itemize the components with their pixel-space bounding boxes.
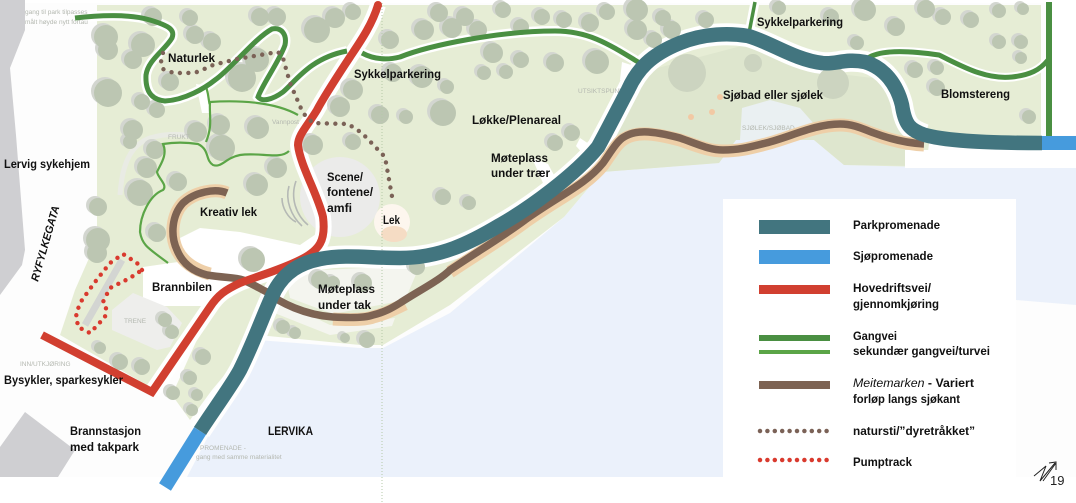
route: Parkpromenade teal <box>200 34 1042 431</box>
water: Lervika <box>187 140 1076 477</box>
map labels: Sykkelparkering <box>757 15 843 29</box>
map labels: LERVIKA <box>268 424 313 438</box>
bathing pond <box>740 100 815 140</box>
park lawn <box>60 5 1041 420</box>
map labels: RYFYLKEGATA <box>29 204 62 283</box>
plaza and road surfaces <box>143 0 1076 306</box>
lek surfacing <box>381 226 407 242</box>
faint base map labels: UTSIKTSPUNKT <box>578 88 628 95</box>
faint base map labels: PROMENADE - <box>200 445 246 452</box>
white road halos <box>75 2 1048 431</box>
map labels: Bysykler, sparkesykler <box>4 373 123 387</box>
map labels: Kreativ lek <box>200 205 257 219</box>
legend: Gangvei: Gangvei <box>853 329 897 343</box>
dotted section line <box>381 3 383 503</box>
legend: Hovedriftsvei: gjennomkjøring <box>853 297 939 311</box>
map labels: Lek <box>383 213 400 227</box>
amphitheatre arcs <box>282 181 308 226</box>
legend: natursti: natursti/”dyretråkket” <box>853 424 975 438</box>
route: pumptrack dotted <box>76 254 142 333</box>
fruit path arc <box>120 134 205 195</box>
route: Meitemarken tan edge <box>173 125 924 320</box>
map labels: under tak <box>318 298 371 312</box>
page number: 19 <box>1050 473 1064 488</box>
map labels: Naturlek <box>168 51 215 65</box>
map labels: fontene/ <box>327 185 374 199</box>
faint base map labels: Vannpost <box>272 119 299 126</box>
map labels: Brannstasjon <box>70 424 141 438</box>
map labels: Brannbilen <box>152 280 212 294</box>
scene circle <box>300 157 380 237</box>
route: secondary walkways <box>140 86 298 263</box>
route: Hovedriftsvei red road <box>42 1 382 392</box>
faint base map labels: gang med samme materialitet <box>196 454 282 461</box>
seaside trees <box>668 54 849 99</box>
lower shore walkway <box>272 300 395 335</box>
legend panel <box>723 199 1016 480</box>
legend: Hovedriftsvei <box>759 281 939 311</box>
faint base map labels: gang til park tilpasses <box>25 9 88 16</box>
legend: Gangvei: sekundær gangvei/turvei <box>853 344 990 358</box>
legend: Meitemarken <box>759 376 974 406</box>
route: Meitemarken brown path <box>173 124 924 318</box>
faint base map labels: SJØLEK/SJØBAD <box>742 125 795 132</box>
route: natursti dotted <box>161 52 393 202</box>
lek circle <box>374 204 410 240</box>
map labels: med takpark <box>70 440 139 454</box>
route: pumptrack base <box>85 260 122 325</box>
legend: Hovedriftsvei: Hovedriftsvei/ <box>853 281 932 295</box>
map labels: Løkke/Plenareal <box>472 113 561 127</box>
route: Gangvei main paths <box>75 2 1049 136</box>
legend: Pumptrack: Pumptrack <box>853 455 912 469</box>
Møteplass under tak plaza <box>285 265 420 314</box>
buildings <box>0 0 75 477</box>
legend: Meitemarken: Meitemarken - Variert <box>853 376 974 390</box>
map labels: amfi <box>327 201 352 215</box>
legend: Parkpromenade: Parkpromenade <box>853 218 940 232</box>
orange play spots <box>688 94 723 120</box>
faint base map labels: INN/UTKJØRING <box>20 361 71 368</box>
map labels: Møteplass <box>318 282 375 296</box>
faint base map labels: FRUKT <box>168 134 190 141</box>
faint base map labels <box>20 9 795 461</box>
route: Sjøpromenade blue segments <box>165 143 1076 487</box>
map labels: Sjøbad eller sjølek <box>723 88 823 102</box>
trene plaza <box>112 293 182 350</box>
legend: Sjøpromenade: Sjøpromenade <box>853 249 933 263</box>
map labels: Blomstereng <box>941 87 1010 101</box>
faint base map labels: målt høyde nytt fortau <box>25 18 88 26</box>
map labels: under trær <box>491 166 550 180</box>
icon: north arrow <box>1034 462 1056 481</box>
legend: Parkpromenade <box>759 218 940 234</box>
map labels: Scene/ <box>327 170 364 184</box>
legend: Meitemarken: forløp langs sjøkant <box>853 392 960 406</box>
faint base map labels: TRENE <box>124 318 147 325</box>
map labels: Sykkelparkering <box>354 67 441 81</box>
trees <box>83 0 1036 416</box>
seaside meadow <box>602 45 926 172</box>
map labels: Møteplass <box>491 151 548 165</box>
map labels: Lervig sykehjem <box>4 157 90 171</box>
legend: Sjøpromenade <box>759 249 933 264</box>
legend: Gangvei <box>759 329 990 358</box>
